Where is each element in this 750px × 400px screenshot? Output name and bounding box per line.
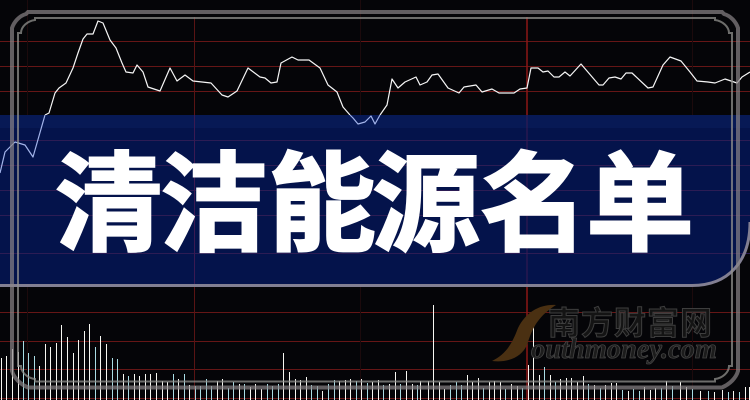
price line inside band — [0, 115, 380, 173]
watermark domain: outhmoney.com — [531, 334, 717, 365]
price line chart, upper section — [45, 21, 750, 115]
watermark: southmoney logo — [492, 305, 717, 365]
title: 清洁能源名单 — [55, 144, 694, 265]
watermark chinese name: 南方财富网 — [548, 305, 712, 341]
navy title band — [0, 115, 750, 286]
volume bars, lower section — [2, 305, 750, 400]
watermark swoosh — [492, 305, 556, 361]
